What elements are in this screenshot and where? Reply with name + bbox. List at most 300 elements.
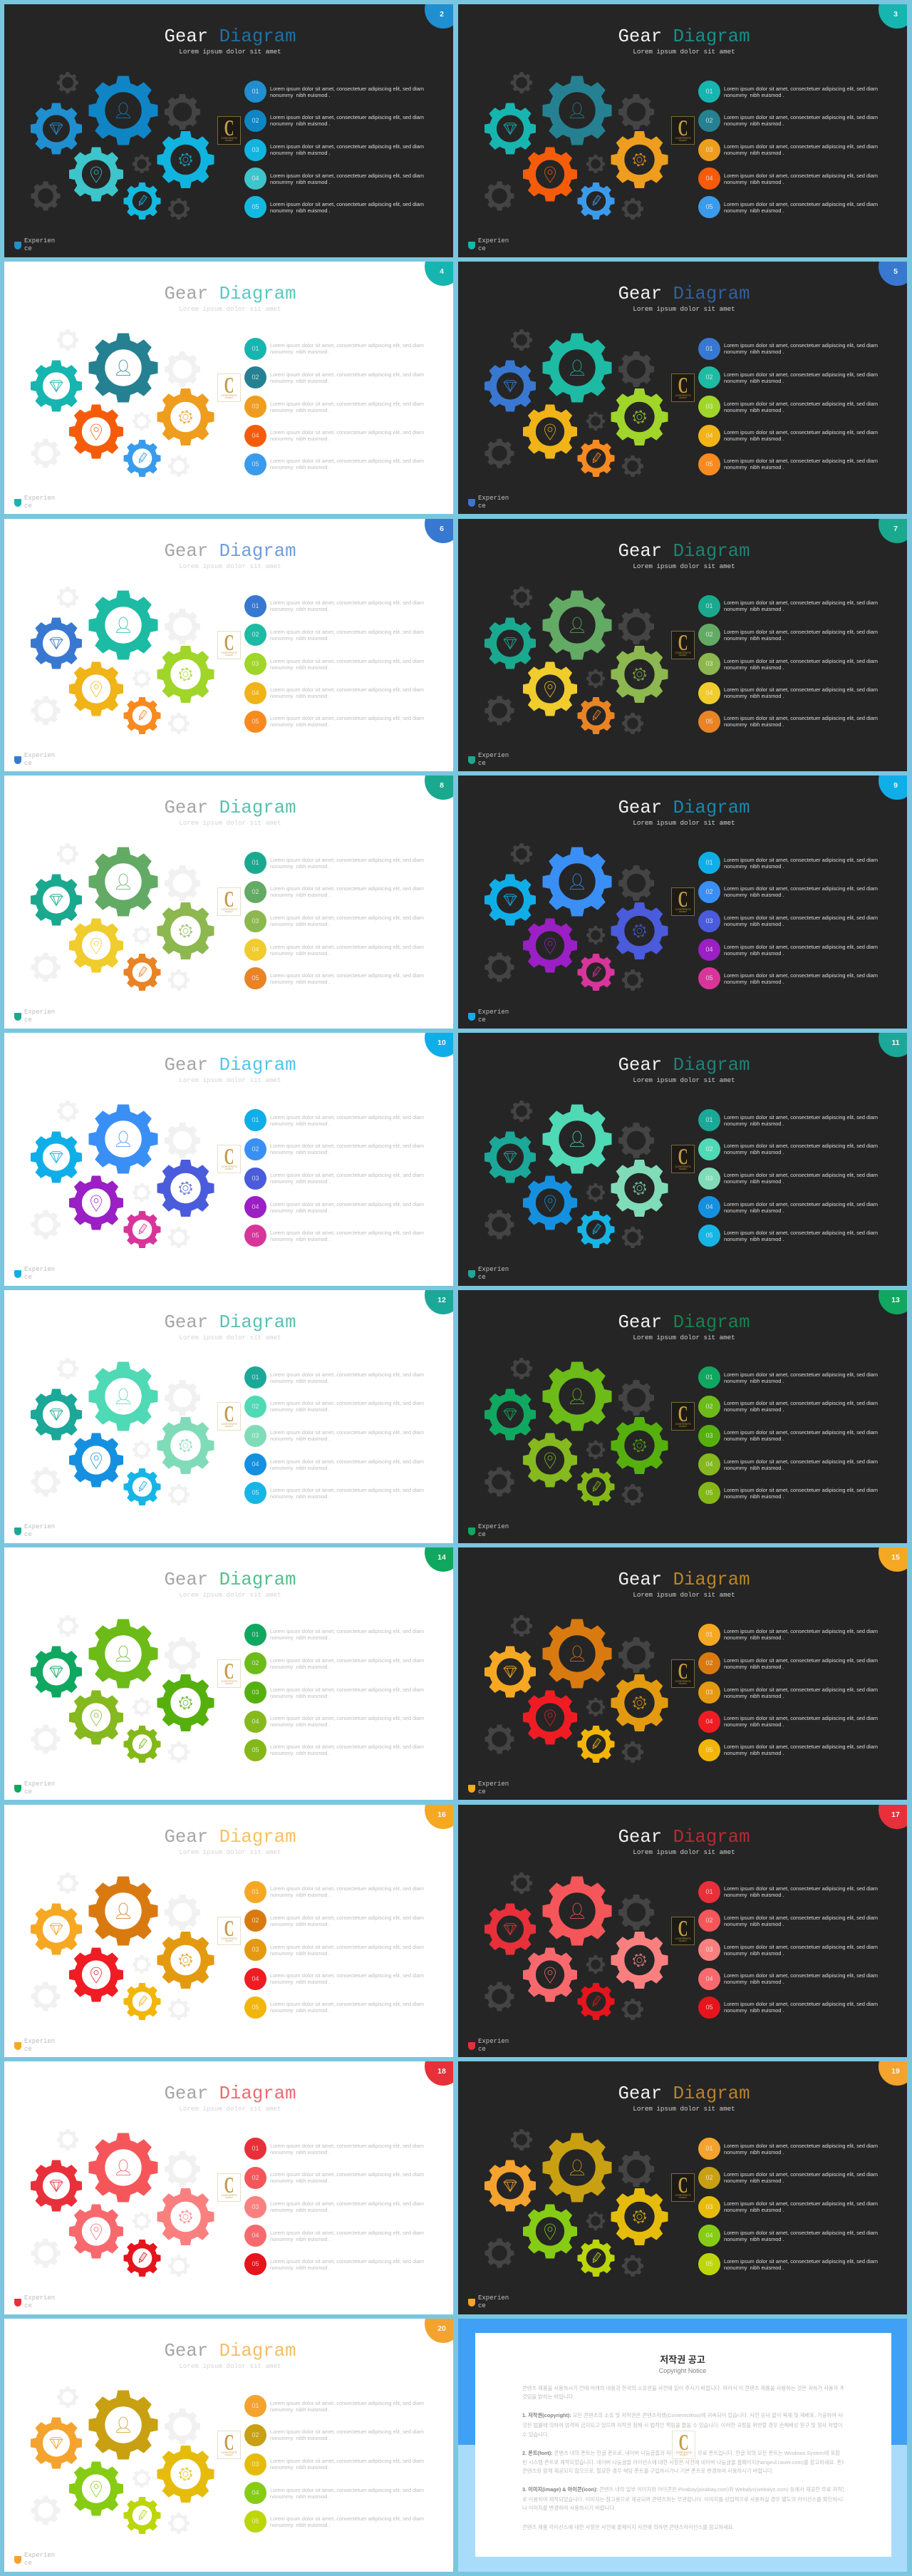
panel: slide 19 xyxy=(458,2061,907,2314)
footer brand: Experience xyxy=(24,2294,55,2309)
item 03: 03 xyxy=(705,1175,712,1182)
gear: person icon xyxy=(543,76,611,145)
item 04 xyxy=(244,1453,424,1475)
watermark logo: CONTENTS xyxy=(675,1937,691,1940)
panel: slide 17 xyxy=(458,1805,907,2057)
item 04 xyxy=(698,168,878,190)
item 05: nonummy nibh euismod . xyxy=(724,979,784,985)
gear diagram xyxy=(4,1805,453,2057)
item 02: Lorem ipsum dolor sit amet, consectetuer adipiscing elit, sed diam xyxy=(724,114,878,120)
item 05: Lorem ipsum dolor sit amet, consectetuer adipiscing elit, sed diam xyxy=(270,2258,424,2265)
page number tab xyxy=(879,247,912,286)
watermark logo: CONTENTS xyxy=(221,1422,237,1426)
item 01 xyxy=(244,595,424,617)
title: Gear Diagram xyxy=(164,1312,296,1333)
title: Gear Diagram xyxy=(618,1055,750,1076)
page number tab xyxy=(879,505,912,543)
page number tab: 13 xyxy=(891,1296,900,1304)
item 03 xyxy=(244,1939,424,1961)
item 02: 02 xyxy=(252,631,259,638)
item 05: 05 xyxy=(705,974,712,982)
item 01 xyxy=(698,338,878,360)
item 03: Lorem ipsum dolor sit amet, consectetuer adipiscing elit, sed diam xyxy=(270,1944,424,1950)
title: Gear Diagram xyxy=(164,541,296,562)
gear: person icon xyxy=(543,1105,611,1174)
item 04 xyxy=(698,1196,878,1218)
footer brand: Experience xyxy=(24,2552,55,2567)
gear: pin icon xyxy=(69,919,123,973)
footer brand xyxy=(468,2038,515,2055)
item 01: 01 xyxy=(252,1374,259,1381)
watermark logo: MARKET xyxy=(679,1168,687,1170)
item 04: nonummy nibh euismod . xyxy=(270,1979,331,1985)
watermark logo: MARKET xyxy=(225,654,233,656)
item 04: 04 xyxy=(705,1718,712,1725)
subtitle: Lorem ipsum dolor sit amet xyxy=(633,2105,735,2113)
item 04 xyxy=(244,1196,424,1218)
item 03: nonummy nibh euismod . xyxy=(270,1436,331,1442)
item 01: nonummy nibh euismod . xyxy=(724,349,784,355)
gear: pin icon xyxy=(523,1433,577,1487)
item 05: Lorem ipsum dolor sit amet, consectetuer adipiscing elit, sed diam xyxy=(724,1743,878,1750)
subtitle: Lorem ipsum dolor sit amet xyxy=(633,48,735,56)
item 05: 05 xyxy=(705,2004,712,2011)
gear: cog icon xyxy=(611,1674,668,1731)
subtitle: Lorem ipsum dolor sit amet xyxy=(179,2362,281,2370)
item 04: 04 xyxy=(252,946,259,953)
panel: slide 10 xyxy=(4,1033,453,1286)
item 04: Lorem ipsum dolor sit amet, consectetuer adipiscing elit, sed diam xyxy=(270,1972,424,1979)
item 05: 05 xyxy=(252,2004,259,2011)
item 04 xyxy=(244,425,424,447)
item 01: nonummy nibh euismod . xyxy=(270,863,331,870)
gear: pencil icon xyxy=(124,954,161,991)
item 04: nonummy nibh euismod . xyxy=(270,693,331,699)
item 01: 01 xyxy=(705,88,712,95)
gear: diamond icon xyxy=(484,1646,536,1697)
item 03: Lorem ipsum dolor sit amet, consectetuer adipiscing elit, sed diam xyxy=(270,2458,424,2464)
watermark logo: MARKET xyxy=(679,2197,687,2199)
item 02: 02 xyxy=(252,117,259,124)
watermark logo xyxy=(671,1659,695,1688)
item 05: Lorem ipsum dolor sit amet, consectetuer adipiscing elit, sed diam xyxy=(724,1230,878,1236)
watermark logo: MARKET xyxy=(679,397,687,399)
gear: pin icon xyxy=(523,1176,577,1230)
item 02: Lorem ipsum dolor sit amet, consectetuer adipiscing elit, sed diam xyxy=(724,1400,878,1406)
item 04: nonummy nibh euismod . xyxy=(724,1207,784,1214)
item 05: Lorem ipsum dolor sit amet, consectetuer adipiscing elit, sed diam xyxy=(724,2258,878,2265)
watermark logo xyxy=(217,887,241,916)
item 05: nonummy nibh euismod . xyxy=(724,207,784,214)
item 05 xyxy=(698,711,878,733)
item 01: Lorem ipsum dolor sit amet, consectetuer adipiscing elit, sed diam xyxy=(270,86,424,91)
item 02 xyxy=(698,1138,878,1160)
gear: diamond icon xyxy=(31,103,82,154)
item 05: Lorem ipsum dolor sit amet, consectetuer adipiscing elit, sed diam xyxy=(724,2001,878,2007)
page number tab: 8 xyxy=(440,781,444,790)
page number tab xyxy=(879,2047,912,2086)
item 01: Lorem ipsum dolor sit amet, consectetuer adipiscing elit, sed diam xyxy=(724,599,878,606)
item 03: nonummy nibh euismod . xyxy=(724,407,784,413)
item 03: 03 xyxy=(252,917,259,924)
watermark logo: CONTENTS xyxy=(675,651,691,654)
gear diagram xyxy=(31,329,214,477)
item 03: 03 xyxy=(252,403,259,410)
footer brand xyxy=(14,2038,61,2055)
title: Gear Diagram xyxy=(618,2083,750,2104)
watermark logo xyxy=(672,2431,695,2459)
item 01 xyxy=(698,1366,878,1389)
page number tab xyxy=(879,1276,912,1314)
footer brand: Experience xyxy=(478,237,509,252)
item 05 xyxy=(698,196,878,218)
section 3 line 3: 나 이미지를 변경하여 사용하시기 바랍니다. xyxy=(522,2505,616,2511)
notice heading: 저작권 공고 xyxy=(660,2354,705,2365)
item 02 xyxy=(244,366,424,388)
watermark logo xyxy=(217,2431,241,2459)
gear: diamond icon xyxy=(484,360,536,411)
gear diagram xyxy=(458,1033,907,1286)
background gears xyxy=(31,2129,200,2277)
gear: pin icon xyxy=(523,1947,577,2001)
gear diagram xyxy=(4,776,453,1029)
item 02: nonummy nibh euismod . xyxy=(270,1149,331,1155)
item 05: nonummy nibh euismod . xyxy=(270,2522,331,2528)
gear: cog icon xyxy=(157,2446,214,2503)
item 02 xyxy=(698,1652,878,1674)
item 03: 03 xyxy=(252,1175,259,1182)
item 03 xyxy=(244,2453,424,2475)
item 01 xyxy=(244,1109,424,1131)
footer brand xyxy=(468,1009,515,1026)
item 01 xyxy=(244,1881,424,1903)
page number tab xyxy=(425,1019,462,1057)
item 05: Lorem ipsum dolor sit amet, consectetuer adipiscing elit, sed diam xyxy=(724,972,878,979)
item 03: 03 xyxy=(705,145,712,153)
notice subheading: Copyright Notice xyxy=(659,2367,706,2374)
item 01: nonummy nibh euismod . xyxy=(724,863,784,870)
item 01: 01 xyxy=(705,859,712,866)
item 03 xyxy=(698,653,878,675)
item 04: nonummy nibh euismod . xyxy=(270,436,331,442)
item 03 xyxy=(698,2196,878,2218)
item 03: nonummy nibh euismod . xyxy=(270,2464,331,2471)
gear: diamond icon xyxy=(484,1903,536,1954)
panel: slide 20 xyxy=(4,2319,453,2572)
item 05: Lorem ipsum dolor sit amet, consectetuer adipiscing elit, sed diam xyxy=(270,1230,424,1236)
panel: slide 7 xyxy=(458,519,907,771)
background gears xyxy=(31,1615,200,1763)
title: Gear Diagram xyxy=(164,2341,296,2361)
item 05: nonummy nibh euismod . xyxy=(724,1493,784,1500)
item 04: 04 xyxy=(705,1460,712,1468)
item 03: nonummy nibh euismod . xyxy=(724,1693,784,1699)
item 04: nonummy nibh euismod . xyxy=(724,1721,784,1728)
item 01 xyxy=(244,81,424,103)
item 02: 02 xyxy=(705,1917,712,1924)
gear: diamond icon xyxy=(484,875,536,926)
panel: slide 18 xyxy=(4,2061,453,2314)
item 01: 01 xyxy=(252,2402,259,2409)
footer brand: Experience xyxy=(478,1266,509,1281)
item 02: nonummy nibh euismod . xyxy=(724,892,784,898)
item 04: 04 xyxy=(705,175,712,182)
item 03: Lorem ipsum dolor sit amet, consectetuer adipiscing elit, sed diam xyxy=(270,1429,424,1436)
item 02 xyxy=(244,2167,424,2189)
item 02: nonummy nibh euismod . xyxy=(724,635,784,642)
item 05: 05 xyxy=(705,718,712,725)
subtitle: Lorem ipsum dolor sit amet xyxy=(179,1591,281,1599)
background gears xyxy=(31,2386,200,2534)
watermark logo: CONTENTS xyxy=(221,651,237,654)
panel: slide 11 xyxy=(458,1033,907,1286)
gear: diamond icon xyxy=(31,875,82,926)
background gears xyxy=(484,2129,654,2277)
item 02: nonummy nibh euismod . xyxy=(270,2178,331,2184)
item 03 xyxy=(698,910,878,932)
gear: pencil icon xyxy=(577,1468,614,1505)
gear: person icon xyxy=(88,1619,158,1688)
item 03: Lorem ipsum dolor sit amet, consectetuer adipiscing elit, sed diam xyxy=(724,1686,878,1693)
gear: pencil icon xyxy=(577,1726,614,1763)
page number tab: 12 xyxy=(437,1296,446,1304)
watermark logo: MARKET xyxy=(225,397,233,399)
item 05: Lorem ipsum dolor sit amet, consectetuer adipiscing elit, sed diam xyxy=(270,1487,424,1493)
item 05: nonummy nibh euismod . xyxy=(270,1236,331,1242)
footer brand: Experience xyxy=(478,2038,509,2053)
watermark logo: MARKET xyxy=(679,1426,687,1428)
item 01: nonummy nibh euismod . xyxy=(724,1120,784,1127)
gear diagram xyxy=(31,587,214,734)
watermark logo xyxy=(671,887,695,916)
item 04: Lorem ipsum dolor sit amet, consectetuer adipiscing elit, sed diam xyxy=(724,1201,878,1207)
watermark logo: MARKET xyxy=(225,911,233,913)
gear diagram xyxy=(458,519,907,771)
item 05: nonummy nibh euismod . xyxy=(724,1236,784,1242)
item 02: 02 xyxy=(705,631,712,638)
title: Gear Diagram xyxy=(618,1827,750,1848)
item 05 xyxy=(244,967,424,989)
subtitle: Lorem ipsum dolor sit amet xyxy=(179,1334,281,1341)
item 01: Lorem ipsum dolor sit amet, consectetuer adipiscing elit, sed diam xyxy=(724,342,878,349)
item 04: Lorem ipsum dolor sit amet, consectetuer adipiscing elit, sed diam xyxy=(724,429,878,436)
item 04 xyxy=(698,1711,878,1733)
item 02 xyxy=(698,881,878,903)
item 01 xyxy=(244,2138,424,2160)
gear: person icon xyxy=(88,333,158,402)
item 05: nonummy nibh euismod . xyxy=(724,464,784,470)
gear: pencil icon xyxy=(577,182,614,220)
footer brand: Experience xyxy=(478,1523,509,1538)
item 01: Lorem ipsum dolor sit amet, consectetuer adipiscing elit, sed diam xyxy=(270,342,424,349)
page number tab: 20 xyxy=(437,2324,446,2333)
item 05 xyxy=(244,453,424,475)
item 02 xyxy=(244,1910,424,1932)
watermark logo: MARKET xyxy=(679,140,687,142)
watermark logo: CONTENTS xyxy=(221,1165,237,1168)
item 05: 05 xyxy=(252,974,259,982)
item 04: nonummy nibh euismod . xyxy=(724,693,784,699)
item 02: nonummy nibh euismod . xyxy=(724,2178,784,2184)
footer brand xyxy=(14,1781,61,1798)
item 02: 02 xyxy=(705,373,712,381)
page number tab xyxy=(879,1533,912,1572)
item 03: nonummy nibh euismod . xyxy=(270,1178,331,1185)
panel: slide 4 xyxy=(4,262,453,514)
gear: pencil icon xyxy=(124,182,161,220)
notice closing line: 콘텐츠 제품 라이선스에 대한 사항은 사전에 홈페이지 사전에 의하면 콘텐츠라이선스를 참고하세요. xyxy=(522,2524,735,2530)
item 03: Lorem ipsum dolor sit amet, consectetuer adipiscing elit, sed diam xyxy=(270,658,424,664)
section 2 line 2: 된 시스템 폰트로 제작되었습니다. 네이버 나눔글꼴 라이선스에 대한 사항은 사전에 네이버 나눔글꼴 홈페이지(hangeul.naver.com)를 참고하세요. 폰트는 xyxy=(522,2459,844,2466)
gear diagram xyxy=(31,72,214,220)
gear: pencil icon xyxy=(577,697,614,734)
gear diagram xyxy=(4,2319,453,2572)
footer brand xyxy=(14,1009,61,1026)
watermark logo xyxy=(671,1917,695,1945)
item 04: 04 xyxy=(705,432,712,439)
background gears xyxy=(484,843,654,991)
gear: pin icon xyxy=(69,1947,123,2001)
item 03: 03 xyxy=(252,2203,259,2210)
item 03 xyxy=(244,139,424,161)
item 04 xyxy=(698,1453,878,1475)
item 03: Lorem ipsum dolor sit amet, consectetuer adipiscing elit, sed diam xyxy=(270,143,424,150)
watermark logo: CONTENTS xyxy=(221,2451,237,2454)
item 04 xyxy=(698,2225,878,2247)
item 03: nonummy nibh euismod . xyxy=(724,921,784,927)
item 01: 01 xyxy=(705,602,712,609)
item 03: nonummy nibh euismod . xyxy=(724,1950,784,1957)
gear: pin icon xyxy=(69,2205,123,2259)
item 02: 02 xyxy=(252,2431,259,2438)
page number tab xyxy=(425,2047,462,2086)
item 03: 03 xyxy=(252,2461,259,2468)
page number tab: 19 xyxy=(891,2067,900,2076)
item 05: 05 xyxy=(705,1232,712,1239)
gear diagram xyxy=(458,1290,907,1542)
item 01: Lorem ipsum dolor sit amet, consectetuer adipiscing elit, sed diam xyxy=(270,1628,424,1634)
footer brand xyxy=(14,2552,61,2569)
item 01: Lorem ipsum dolor sit amet, consectetuer adipiscing elit, sed diam xyxy=(270,2399,424,2406)
panel: slide 2 xyxy=(4,4,453,257)
watermark logo: MARKET xyxy=(679,654,687,656)
page number tab: 7 xyxy=(893,525,898,533)
item 04: 04 xyxy=(705,1203,712,1210)
item 01 xyxy=(698,1881,878,1903)
gear: diamond icon xyxy=(31,2160,82,2212)
item 02 xyxy=(244,1652,424,1674)
item 03: Lorem ipsum dolor sit amet, consectetuer adipiscing elit, sed diam xyxy=(724,1944,878,1950)
item 01: nonummy nibh euismod . xyxy=(270,606,331,612)
gear: pencil icon xyxy=(124,1211,161,1248)
item 01: 01 xyxy=(252,602,259,609)
page number tab: 2 xyxy=(440,10,444,19)
item 03: 03 xyxy=(252,1689,259,1696)
item 02: Lorem ipsum dolor sit amet, consectetuer adipiscing elit, sed diam xyxy=(270,2171,424,2178)
item 02 xyxy=(244,1138,424,1160)
item 05: 05 xyxy=(705,460,712,468)
footer brand xyxy=(14,1523,61,1540)
item 01: 01 xyxy=(252,859,259,866)
item 04: 04 xyxy=(705,689,712,696)
item 04: nonummy nibh euismod . xyxy=(724,178,784,185)
item 04: Lorem ipsum dolor sit amet, consectetuer adipiscing elit, sed diam xyxy=(724,1458,878,1464)
gear: cog icon xyxy=(611,2188,668,2245)
gear: person icon xyxy=(88,1876,158,1945)
gear: pencil icon xyxy=(124,2497,161,2534)
gear: cog icon xyxy=(157,1932,214,1989)
item 03: 03 xyxy=(252,1946,259,1953)
gear: diamond icon xyxy=(484,2160,536,2212)
item 03 xyxy=(244,1681,424,1704)
item 02: 02 xyxy=(705,1145,712,1153)
item 05: 05 xyxy=(705,2260,712,2267)
gear: pin icon xyxy=(523,2205,577,2259)
watermark logo xyxy=(217,1145,241,1173)
page number tab xyxy=(425,1276,462,1314)
item 04: nonummy nibh euismod . xyxy=(724,950,784,957)
item 03: nonummy nibh euismod . xyxy=(270,1950,331,1957)
gear: diamond icon xyxy=(484,617,536,669)
item 03: Lorem ipsum dolor sit amet, consectetuer adipiscing elit, sed diam xyxy=(724,915,878,921)
watermark logo: CONTENTS xyxy=(675,1422,691,1426)
item 01: 01 xyxy=(705,1116,712,1123)
item 05 xyxy=(698,2253,878,2275)
item 03: Lorem ipsum dolor sit amet, consectetuer adipiscing elit, sed diam xyxy=(270,1686,424,1693)
page number tab xyxy=(425,1533,462,1572)
gear diagram xyxy=(458,2061,907,2314)
item 05: nonummy nibh euismod . xyxy=(270,1750,331,1756)
item 05: 05 xyxy=(705,1489,712,1496)
item 02: nonummy nibh euismod . xyxy=(724,1149,784,1155)
gear: person icon xyxy=(88,2133,158,2203)
item 05 xyxy=(698,1225,878,1247)
watermark logo: MARKET xyxy=(225,1940,233,1942)
watermark logo xyxy=(671,1402,695,1431)
item 03: nonummy nibh euismod . xyxy=(724,2207,784,2213)
footer brand: Experience xyxy=(24,1266,55,1281)
gear: cog icon xyxy=(157,131,214,188)
item 05 xyxy=(244,1739,424,1761)
watermark logo: CONTENTS xyxy=(221,393,237,397)
item 04 xyxy=(244,1968,424,1990)
item 03 xyxy=(698,139,878,161)
item 05 xyxy=(698,453,878,475)
item 02: Lorem ipsum dolor sit amet, consectetuer adipiscing elit, sed diam xyxy=(724,1915,878,1921)
item 05: nonummy nibh euismod . xyxy=(270,2007,331,2014)
item 04: 04 xyxy=(252,2489,259,2496)
item 04: 04 xyxy=(252,1460,259,1468)
footer brand: Experience xyxy=(478,1781,509,1796)
watermark logo: MARKET xyxy=(225,140,233,142)
item 02: 02 xyxy=(705,888,712,895)
item 05: 05 xyxy=(252,460,259,468)
item 03 xyxy=(244,1168,424,1190)
item 04: Lorem ipsum dolor sit amet, consectetuer adipiscing elit, sed diam xyxy=(270,1201,424,1207)
watermark logo: CONTENTS xyxy=(221,2193,237,2197)
item 02 xyxy=(698,110,878,132)
item 01: 01 xyxy=(705,1374,712,1381)
gear: cog icon xyxy=(157,1674,214,1731)
subtitle: Lorem ipsum dolor sit amet xyxy=(179,562,281,570)
item 04 xyxy=(698,425,878,447)
page number tab: 5 xyxy=(893,267,898,276)
gear: pin icon xyxy=(69,147,123,201)
item 02 xyxy=(698,2167,878,2189)
item 05: Lorem ipsum dolor sit amet, consectetuer adipiscing elit, sed diam xyxy=(270,2515,424,2522)
item 04: Lorem ipsum dolor sit amet, consectetuer adipiscing elit, sed diam xyxy=(270,172,424,178)
item 02: nonummy nibh euismod . xyxy=(724,1664,784,1670)
